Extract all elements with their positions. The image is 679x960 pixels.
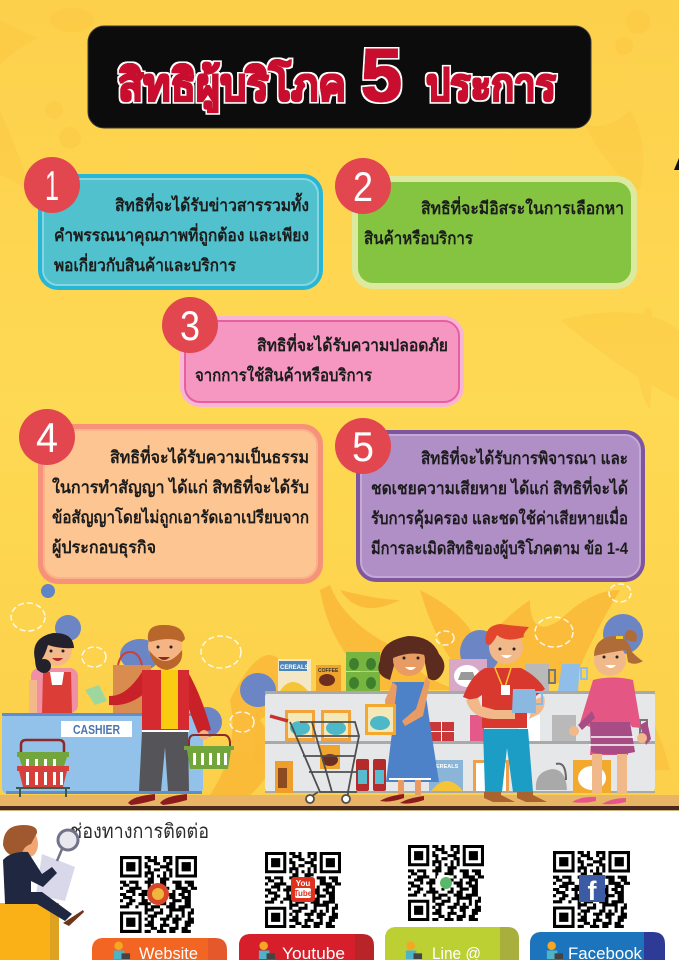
title text bbox=[118, 34, 556, 117]
icon: reading man on box bbox=[0, 825, 84, 960]
title text: 5 bbox=[361, 34, 402, 117]
cashier counter bbox=[2, 713, 203, 794]
cashier woman bbox=[29, 633, 78, 713]
button: facebook bbox=[530, 932, 665, 960]
panel: right 5 bbox=[335, 418, 645, 582]
shopping cart bbox=[270, 716, 359, 803]
text 3 bbox=[195, 333, 448, 385]
text 2: สิทธิที่จะมีอิสระในการเลือกหา bbox=[421, 196, 624, 218]
button: youtube bbox=[239, 934, 374, 960]
text 5 bbox=[371, 446, 628, 560]
mid shelf goods bbox=[285, 710, 647, 741]
text 1: คำพรรณนาคุณภาพที่ถูกต้อง และเพียง bbox=[54, 223, 309, 247]
title banner bbox=[88, 26, 591, 128]
text 1: พอเกี่ยวกับสินค้าและบริการ bbox=[54, 253, 237, 275]
text 4 bbox=[52, 445, 309, 559]
badge 1: 1 bbox=[45, 162, 59, 209]
decorative dots bbox=[11, 584, 643, 737]
title text: ประการ bbox=[426, 61, 556, 110]
white footer background bbox=[0, 810, 679, 960]
badge 3: 3 bbox=[180, 302, 200, 349]
text 2: สินค้าหรือบริการ bbox=[364, 228, 474, 248]
qr: youtube: Tube bbox=[294, 889, 313, 898]
text 3: จากการใช้สินค้าหรือบริการ bbox=[195, 365, 373, 385]
text 1: สิทธิที่จะได้รับข่าวสารรวมทั้ง bbox=[115, 192, 309, 215]
panel: right 2 bbox=[335, 158, 637, 289]
text 4: ข้อสัญญาโดยไม่ถูกเอารัดเอาเปรียบจาก bbox=[52, 507, 309, 529]
edge mark bbox=[674, 158, 679, 170]
sign: CASHIER bbox=[73, 722, 120, 737]
text 3: สิทธิที่จะได้รับความปลอดภัย bbox=[257, 333, 448, 355]
text 5: สิทธิที่จะได้รับการพิจารณา และ bbox=[421, 446, 628, 468]
text 4: ผู้ประกอบธุรกิจ bbox=[52, 538, 156, 559]
panel: right 4 bbox=[19, 409, 323, 584]
qr: facebook: f bbox=[588, 876, 598, 906]
text 5: ชดเชยความเสียหาย ได้แก่ สิทธิที่จะได้ bbox=[371, 476, 628, 498]
badge 3 bbox=[162, 297, 218, 353]
floor bbox=[0, 795, 679, 810]
panel: right 1 bbox=[24, 157, 323, 290]
qr: facebook bbox=[553, 851, 630, 928]
stacked baskets bbox=[16, 740, 70, 797]
qr: youtube: You bbox=[296, 879, 310, 888]
badge 4 bbox=[19, 409, 75, 465]
customer woman bbox=[365, 636, 444, 804]
hand basket bbox=[184, 735, 234, 769]
text 5: รับการคุ้มครอง และชดใช้ค่าเสียหายเมื่อ bbox=[371, 506, 628, 529]
button: line bbox=[385, 927, 519, 960]
top shelf goods: COFFEE bbox=[318, 668, 339, 674]
qr: website bbox=[120, 856, 197, 933]
text 2 bbox=[364, 196, 624, 248]
low shelf goods bbox=[275, 745, 611, 793]
badge 1 bbox=[24, 157, 80, 213]
shelf bbox=[265, 652, 655, 793]
badge 2 bbox=[335, 158, 391, 214]
badge 5: 5 bbox=[352, 423, 374, 470]
title text: สิทธิผู้บริโภค bbox=[118, 58, 346, 112]
text 4: ในการทำสัญญา ได้แก่ สิทธิที่จะได้รับ bbox=[52, 475, 309, 498]
shopping man bbox=[85, 625, 234, 805]
text 1 bbox=[54, 192, 309, 275]
low shelf goods: CEREALS bbox=[432, 764, 459, 770]
badge 4: 4 bbox=[36, 414, 58, 461]
badge 5 bbox=[335, 418, 391, 474]
staff man bbox=[463, 624, 547, 802]
girl bbox=[569, 630, 651, 804]
panel: right 3 bbox=[162, 297, 464, 407]
top shelf goods bbox=[278, 652, 587, 691]
text 4: สิทธิที่จะได้รับความเป็นธรรม bbox=[110, 445, 309, 467]
qr: youtube bbox=[265, 852, 341, 928]
top shelf goods: CEREALS bbox=[280, 665, 309, 671]
text 5: มีการละเมิดสิทธิของผู้บริโภคตาม ข้อ 1-4 bbox=[371, 538, 628, 560]
badge 2: 2 bbox=[353, 163, 373, 210]
qr: line bbox=[408, 845, 484, 921]
contact heading: ช่องทางการติดต่อ bbox=[70, 821, 209, 843]
button: website bbox=[92, 938, 227, 960]
